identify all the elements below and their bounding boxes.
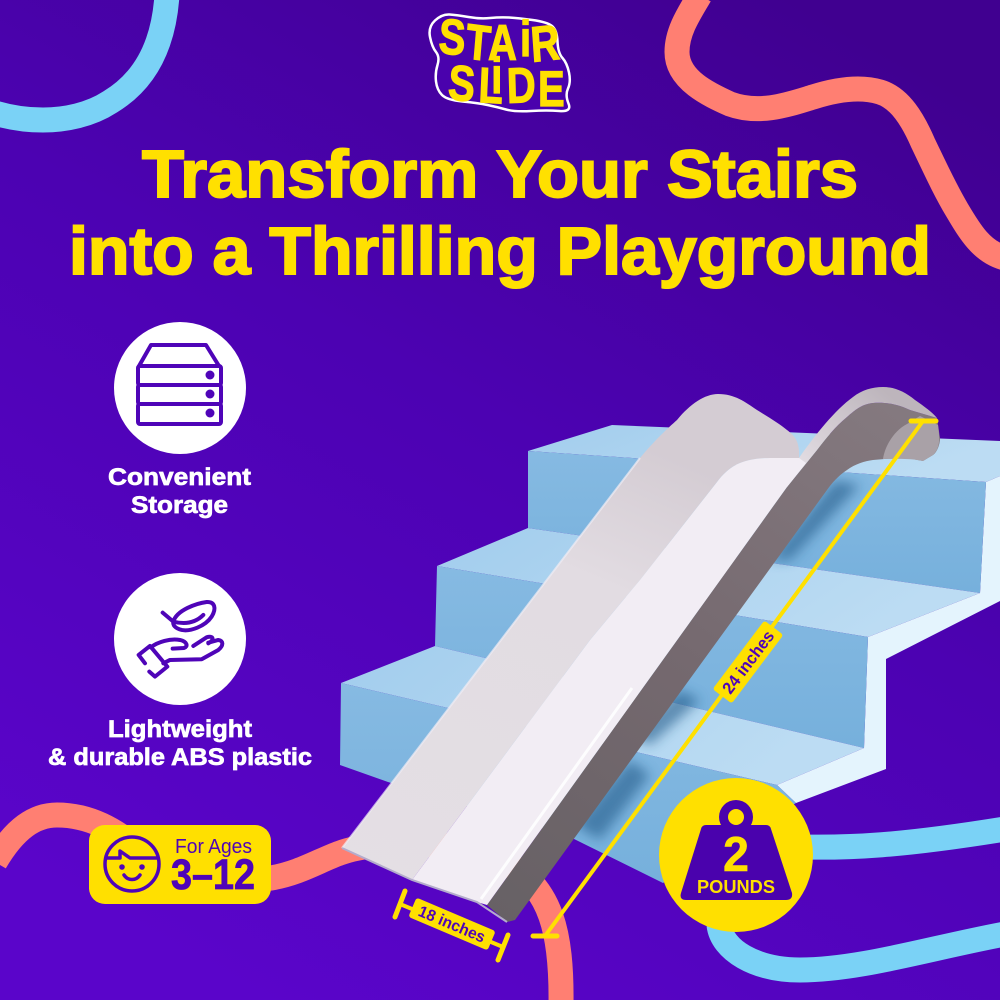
slide highlights and bottom edge [342,458,640,848]
title: into a Thrilling Playground [69,214,931,289]
text: lightweight: & durable ABS plastic [48,744,312,771]
stairs [340,425,1000,883]
badge: for ages [89,825,271,904]
text: convenient storage: Convenient [108,464,251,491]
bottom step riser [340,683,796,883]
slide shadow [575,480,860,840]
top step tread [528,425,1000,482]
slide [342,387,940,922]
slide outer rim [770,387,937,490]
measure: 18 inches: 18 inches [416,903,488,947]
ribbon: lower right blue [800,829,1000,847]
ribbon: top left blue [0,0,167,120]
icon: child face [105,837,159,891]
logo [430,8,570,117]
badge: weight: 2 [723,828,749,882]
measure: 24 inches [533,421,936,936]
ribbon: bottom left coral [0,815,561,1000]
badge: weight: POUNDS [697,876,775,897]
logo: SLiDE [446,48,565,117]
white side lip [777,476,1000,803]
top step riser [528,451,986,593]
slide left panel [342,394,799,880]
measure: 24 inches: 24 inches [719,627,778,698]
text: convenient storage [108,464,251,519]
middle step riser [435,566,868,748]
icon: storage [114,322,246,454]
slide curved tip [883,416,939,461]
badge: for ages: 3–12 [171,851,255,899]
text: convenient storage: Storage [131,492,228,519]
middle step tread [437,528,980,637]
title: Transform Your Stairs [142,137,858,212]
ribbon: top right coral [677,0,1000,258]
ribbon: bottom right blue [719,925,1000,970]
icon: kettle weight [681,825,792,900]
bottom step tread [341,646,864,785]
measure: 18 inches [395,891,508,960]
badge: weight [659,778,813,932]
text: lightweight [48,716,312,771]
slide centre panel [412,458,806,905]
text: lightweight: Lightweight [108,716,252,743]
title [69,137,931,289]
icon: hand and feather [114,573,246,705]
badge: for ages: For Ages [175,836,252,858]
logo: STAiR [437,8,562,73]
slide dark side wall [487,403,940,922]
